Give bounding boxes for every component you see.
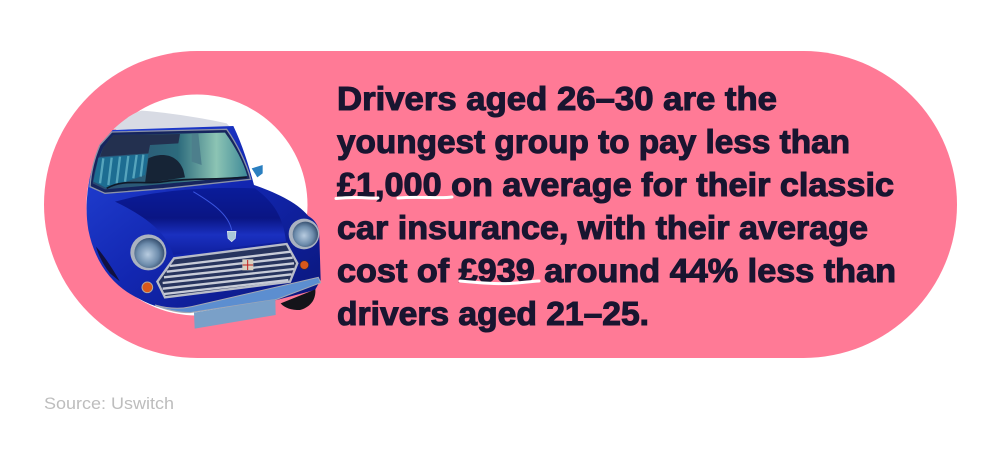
- car body: [87, 126, 321, 313]
- white circle behind car: [86, 94, 308, 316]
- right headlight: [289, 219, 319, 249]
- striped seat: [93, 154, 148, 188]
- hood badge: [227, 231, 236, 242]
- windscreen frame: [90, 129, 251, 193]
- number plate: [194, 299, 276, 329]
- hood crease: [193, 192, 232, 230]
- wheel arch shadow: [96, 247, 120, 282]
- wing mirror: [252, 165, 263, 177]
- windscreen glass: [93, 133, 247, 189]
- pillar: [192, 133, 202, 165]
- source note: Source: Uswitch: [44, 394, 174, 413]
- bumper: [155, 277, 321, 313]
- icon: blue classic car: [87, 111, 321, 329]
- grille badge: [242, 259, 253, 270]
- hood: [115, 188, 286, 255]
- main text: car insurance, with their average: [337, 209, 868, 246]
- main text: £1,000 on average for their classic: [337, 166, 894, 203]
- main text: cost of £939 around 44% less than: [337, 252, 896, 289]
- underline: £939: [460, 281, 539, 284]
- upper reflections: [100, 134, 180, 157]
- underline: £1,000: [336, 197, 452, 198]
- headrest seat: [145, 155, 185, 183]
- main text: [337, 80, 896, 332]
- main text: Drivers aged 26–30 are the: [337, 80, 777, 117]
- panel: pink pill: [44, 51, 957, 358]
- car roof: [113, 111, 233, 131]
- left headlight: [130, 234, 166, 270]
- grille: [157, 244, 297, 297]
- wipers: [107, 177, 247, 188]
- main text: youngest group to pay less than: [337, 123, 850, 160]
- indicators: [142, 282, 153, 293]
- tyre: [281, 289, 315, 310]
- grille bars: [163, 252, 294, 294]
- main text: drivers aged 21–25.: [337, 295, 649, 332]
